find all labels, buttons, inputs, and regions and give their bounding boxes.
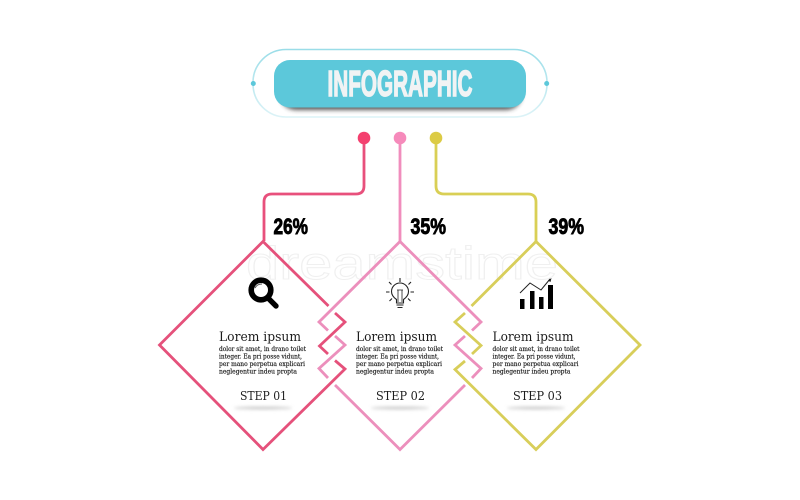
step label: STEP 01 — [240, 389, 287, 403]
shadow — [234, 406, 292, 410]
icon: bar chart — [520, 278, 553, 309]
body: integer. Ea pri posse vidunt, — [356, 354, 439, 360]
body: per mano perpetua explicari — [492, 361, 579, 368]
header outer ring — [253, 50, 547, 117]
percent 39: 39% — [548, 214, 584, 239]
percent 35: 35% — [410, 214, 446, 239]
step 1 text — [219, 330, 307, 410]
step label: STEP 02 — [376, 389, 425, 403]
diamond: red — [160, 242, 345, 450]
step 2 text — [356, 330, 444, 410]
heading: Lorem ipsum — [356, 330, 437, 345]
body: dolor sit amet, in drano toilet — [356, 346, 444, 353]
heading: Lorem ipsum — [219, 330, 301, 345]
step 3 text — [492, 330, 580, 410]
body: neglegentur indeu propta — [356, 368, 434, 376]
heading: Lorem ipsum — [492, 330, 574, 345]
connector: pink — [394, 132, 406, 241]
step label: STEP 03 — [513, 389, 562, 403]
pill shadow — [280, 66, 522, 110]
diamond: pink — [319, 242, 481, 450]
body — [492, 346, 580, 376]
title: INFOGRAPHIC — [328, 63, 473, 104]
ring dot left — [251, 81, 256, 86]
body: dolor sit amet, in drano toilet — [219, 346, 307, 353]
watermark: dreamstime — [246, 237, 558, 289]
title pill — [274, 60, 526, 108]
icon: magnifier — [251, 280, 276, 306]
body — [356, 346, 444, 376]
shadow — [507, 406, 565, 410]
shadow — [371, 406, 429, 410]
connector: yellow — [430, 132, 536, 241]
body: integer. Ea pri posse vidunt, — [219, 354, 302, 360]
body: per mano perpetua explicari — [219, 361, 305, 368]
body — [219, 346, 307, 376]
diamond: yellow — [455, 242, 640, 450]
header badge — [251, 50, 549, 117]
body: per mano perpetua explicari — [356, 361, 442, 368]
connector: red — [264, 132, 370, 241]
icon: light bulb — [386, 278, 414, 308]
body: integer. Ea pri posse vidunt, — [492, 354, 576, 360]
body: neglegentur indeu propta — [219, 368, 297, 376]
body: dolor sit amet, in drano toilet — [492, 346, 580, 353]
percent 26: 26% — [274, 214, 308, 239]
body: neglegentur indeu propta — [492, 368, 571, 376]
ring dot right — [544, 81, 549, 86]
